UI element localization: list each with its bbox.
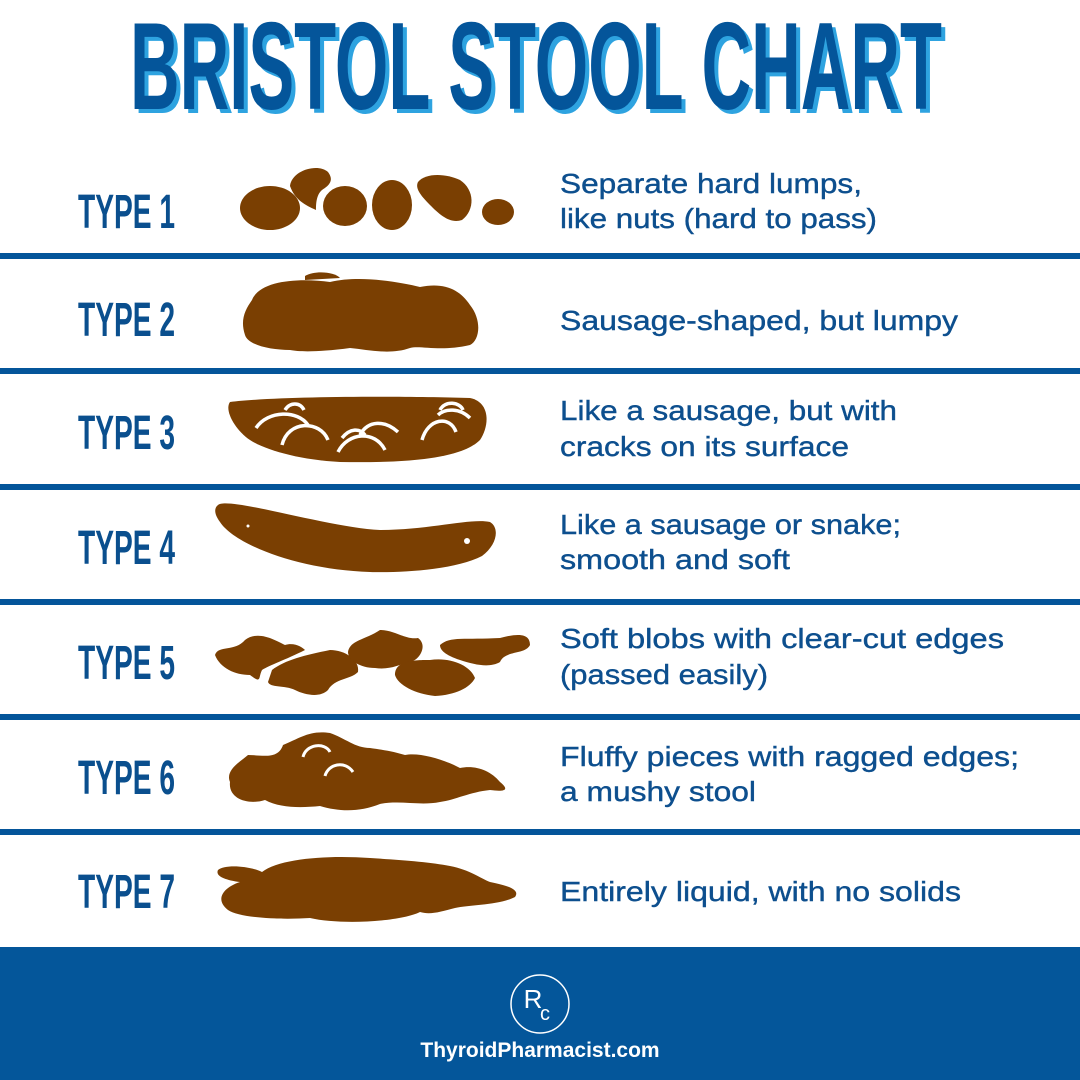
stool type 5 (215, 630, 530, 696)
logo: c (540, 1003, 550, 1025)
descriptions: Fluffy pieces with ragged edges; (560, 741, 1019, 772)
descriptions: smooth and soft (560, 544, 790, 575)
type labels: TYPE 6 (78, 752, 175, 805)
type labels (78, 186, 175, 919)
stool type 7 (217, 857, 516, 922)
descriptions: Entirely liquid, with no solids (560, 876, 961, 907)
website: ThyroidPharmacist.com (420, 1039, 660, 1062)
stool type 2 (243, 272, 478, 352)
descriptions: Sausage-shaped, but lumpy (560, 305, 958, 336)
descriptions: like nuts (hard to pass) (560, 203, 877, 234)
stool type 1 (240, 168, 514, 230)
descriptions: a mushy stool (560, 776, 756, 807)
stool type 6 (229, 732, 505, 810)
descriptions: cracks on its surface (560, 431, 849, 462)
type labels: TYPE 7 (78, 866, 175, 919)
descriptions (560, 168, 1019, 907)
descriptions: (passed easily) (560, 659, 768, 690)
type labels: TYPE 2 (78, 294, 175, 347)
type labels: TYPE 5 (78, 637, 175, 690)
logo (511, 975, 569, 1033)
stool type 4 (215, 503, 496, 572)
descriptions: Like a sausage or snake; (560, 509, 901, 540)
logo: R (524, 984, 542, 1014)
descriptions: Soft blobs with clear-cut edges (560, 623, 1004, 654)
footer (0, 947, 1080, 1080)
type labels: TYPE 1 (78, 186, 175, 239)
descriptions: Like a sausage, but with (560, 395, 897, 426)
stool type 3 (228, 397, 487, 462)
descriptions: Separate hard lumps, (560, 168, 862, 199)
type labels: TYPE 3 (78, 407, 175, 460)
type labels: TYPE 4 (78, 522, 175, 575)
